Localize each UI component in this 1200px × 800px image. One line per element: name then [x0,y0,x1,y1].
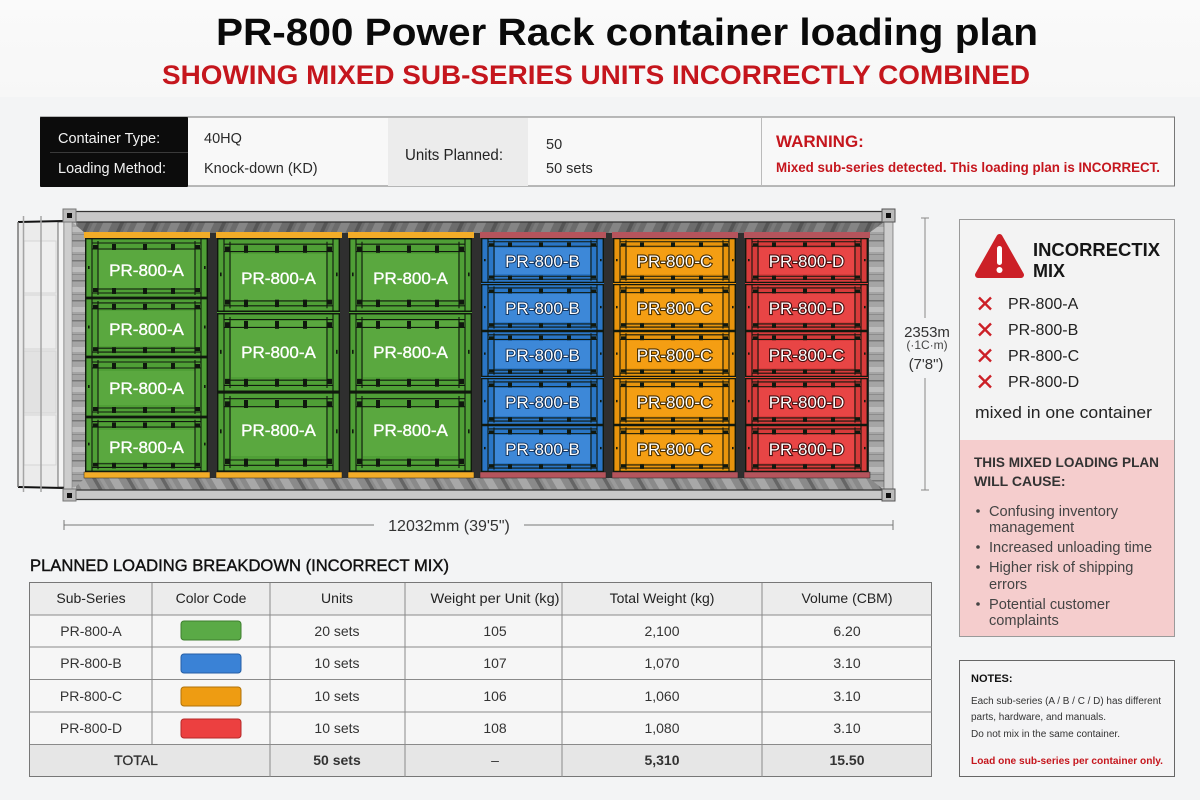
warning: Mixed sub-series detected. This loading plan is INCORRECT. [776,160,1160,175]
column: PR-800-A stack 2: PR-800-A [241,343,316,362]
column: PR-800-A stack 3 [348,232,474,478]
container diagram [18,209,895,501]
notes panel: Each sub-series (A / B / C / D) has different [971,696,1161,707]
units planned: 50 [546,137,562,153]
consequences block: WILL CAUSE: [974,473,1066,489]
notes panel: parts, hardware, and manuals. [971,712,1106,723]
column: PR-800-C: PR-800-C [637,346,712,365]
info bar values: Knock-down (KD) [204,161,318,177]
header band [0,0,1200,97]
table header: Volume (CBM) [801,590,893,606]
row: total: 5,310 [644,752,680,768]
mix caption: mixed in one container [975,403,1152,422]
length dimension [64,518,893,535]
row: total: 15.50 [829,752,865,768]
column: PR-800-A stack 2: PR-800-A [241,421,316,440]
height dimension [904,218,950,490]
row: PR-800-D [60,719,861,738]
table header: Total Weight (kg) [610,590,714,606]
info bar labels [40,117,188,187]
column: PR-800-B [480,232,606,478]
crossed list: PR-800-A [1008,296,1079,313]
panel heading [1033,240,1160,281]
info bar labels: Loading Method: [58,161,166,177]
info bar labels: Container Type: [58,131,160,147]
units planned: 50 sets [546,161,593,177]
column: PR-800-A stack 1: PR-800-A [109,261,184,280]
crossed list: PR-800-C [1008,348,1079,365]
consequences block: complaints [989,613,1059,629]
table header: Units [321,590,353,606]
notes panel: Do not mix in the same container. [971,729,1120,740]
column: PR-800-A stack 2 [216,232,342,478]
row: PR-800-A: 6.20 [833,623,861,639]
column: PR-800-B: PR-800-B [505,393,580,412]
column: PR-800-A stack 1 [84,232,210,478]
notes panel [960,660,1174,776]
panel heading: MIX [1033,261,1065,281]
column: PR-800-C: PR-800-C [637,299,712,318]
row: PR-800-D: PR-800-D [60,720,122,736]
panel heading: INCORRECTIX [1033,240,1160,260]
breakdown table [30,582,932,777]
row: PR-800-C [60,687,861,706]
consequences block: Confusing inventory [989,504,1119,520]
row: PR-800-A: 105 [483,623,507,639]
container door [18,216,64,492]
row: PR-800-D: 10 sets [314,720,360,736]
crossed list: PR-800-B [1008,322,1078,339]
title: PR-800 Power Rack container loading plan [216,12,1038,54]
table heading: PLANNED LOADING BREAKDOWN (INCORRECT MIX) [30,557,449,575]
consequences block: THIS MIXED LOADING PLAN [974,454,1159,470]
row: PR-800-C: 106 [483,688,507,704]
row: PR-800-A: 2,100 [644,623,680,639]
column: PR-800-D: PR-800-C [769,346,844,365]
consequences block: errors [989,577,1027,593]
column: PR-800-A stack 3: PR-800-A [373,421,448,440]
column: PR-800-C: PR-800-C [637,393,712,412]
row: total: – [491,752,499,768]
row: PR-800-B: 107 [483,655,507,671]
corner castings [63,209,895,501]
column: PR-800-A stack 3: PR-800-A [373,343,448,362]
column: PR-800-B: PR-800-B [505,299,580,318]
column: PR-800-A stack 1: PR-800-A [109,379,184,398]
row: PR-800-A: PR-800-A [60,623,122,639]
length dimension: 12032mm (39'5") [388,518,510,535]
row: PR-800-B: PR-800-B [60,655,122,671]
notes panel: NOTES: [971,673,1013,685]
consequences block: Increased unloading time [989,540,1152,556]
notes panel: Load one sub-series per container only. [971,755,1163,767]
row: PR-800-A [60,621,861,640]
table header: Weight per Unit (kg) [430,590,560,606]
consequences block: management [989,520,1074,536]
column: PR-800-C [612,232,738,478]
crossed list: PR-800-D [1008,374,1079,391]
column: PR-800-D: PR-800-D [769,299,844,318]
column: PR-800-D: PR-800-D [769,440,844,459]
column: PR-800-C: PR-800-C [637,252,712,271]
column: PR-800-B: PR-800-B [505,346,580,365]
icon: warning triangle [978,237,1021,275]
info bar [40,117,1174,187]
consequences block: Potential customer [989,597,1110,613]
row: PR-800-B [60,654,861,673]
row: PR-800-B: 3.10 [833,655,861,671]
table header [56,590,893,606]
column: PR-800-B: PR-800-B [505,252,580,271]
warning: WARNING: [776,132,864,151]
container interior [64,211,893,500]
row: PR-800-D: 108 [483,720,507,736]
units planned [388,118,593,186]
row: PR-800-C: 10 sets [314,688,360,704]
row: PR-800-D: 1,080 [644,720,680,736]
row: PR-800-A: 20 sets [314,623,360,639]
consequences block [960,440,1174,636]
column: PR-800-B: PR-800-B [505,440,580,459]
column: PR-800-D: PR-800-D [769,393,844,412]
column: PR-800-D [744,232,870,478]
units planned: Units Planned: [405,147,503,164]
table header: Color Code [176,590,247,606]
warning [776,132,1160,175]
info bar values: 40HQ [204,131,242,147]
row: PR-800-C: 3.10 [833,688,861,704]
column: PR-800-A stack 2: PR-800-A [241,269,316,288]
row: total: TOTAL [114,752,158,768]
column: PR-800-A stack 1: PR-800-A [109,438,184,457]
row: PR-800-C: PR-800-C [60,688,122,704]
row: total [114,752,865,768]
column: PR-800-A stack 3: PR-800-A [373,269,448,288]
row: total: 50 sets [313,752,361,768]
info bar values [204,131,318,177]
row: PR-800-B: 1,070 [644,655,680,671]
row: PR-800-D: 3.10 [833,720,861,736]
consequences block: Higher risk of shipping [989,560,1133,576]
height dimension: (7'8") [909,356,943,373]
side panel: incorrect mix [960,220,1174,636]
subtitle: SHOWING MIXED SUB-SERIES UNITS INCORRECTLY COMBINED [162,60,1030,90]
row: PR-800-B: 10 sets [314,655,360,671]
table header: Sub-Series [56,590,126,606]
column: PR-800-C: PR-800-C [637,440,712,459]
column: PR-800-D: PR-800-D [769,252,844,271]
column: PR-800-A stack 1: PR-800-A [109,320,184,339]
crossed list [979,296,1079,391]
row: PR-800-C: 1,060 [644,688,680,704]
height dimension: (·1C·m) [906,338,948,352]
height dimension: 2353m [904,324,950,341]
